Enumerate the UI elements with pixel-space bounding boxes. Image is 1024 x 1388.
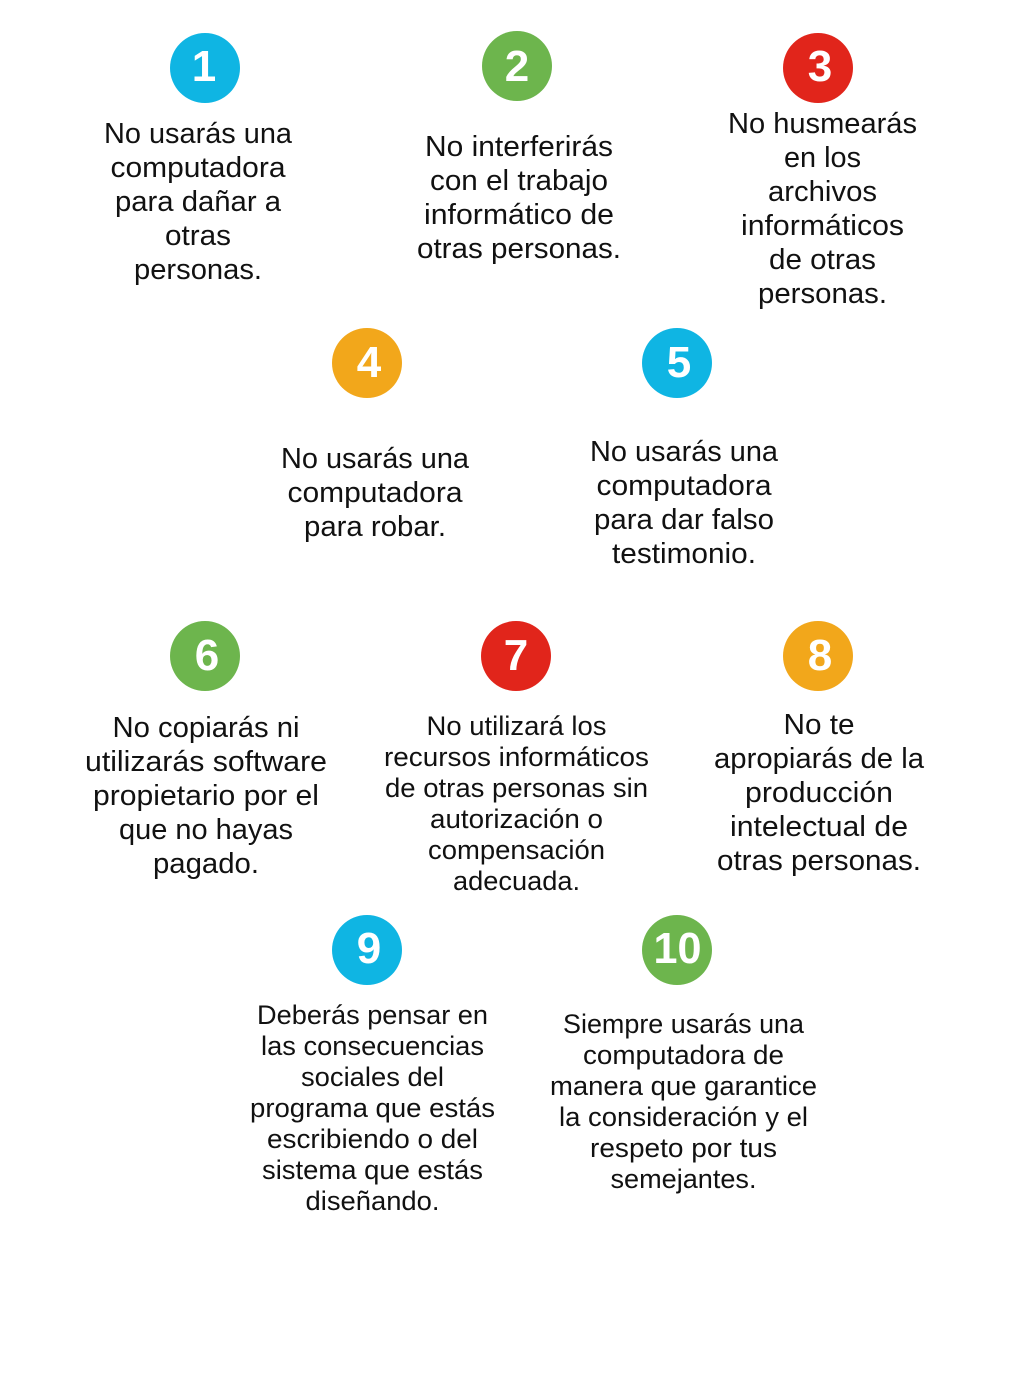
text: rule 2: informático de [424, 199, 614, 231]
text: rule 7: autorización o [430, 804, 603, 834]
text: rule 4: computadora [288, 477, 463, 509]
text: rule 9: programa que estás [250, 1093, 495, 1123]
panel: rule 2 [417, 31, 621, 265]
text: rule 1 [104, 118, 293, 286]
panel: rule 7 [384, 621, 649, 896]
text: rule 8: No te [784, 709, 854, 741]
icon: number 5 badge [642, 328, 712, 398]
text: rule 8: producción [745, 777, 893, 809]
text: rule 10: respeto por tus [590, 1133, 777, 1163]
icon: number 1 badge [170, 33, 240, 103]
text: rule 2 [417, 131, 621, 265]
icon: number 10 badge [642, 915, 712, 985]
text: rule 5: testimonio. [612, 538, 756, 570]
icon: number 10 badge: 10 [654, 924, 702, 973]
icon: number 8 badge [783, 621, 853, 691]
text: rule 2: No interferirás [425, 131, 613, 163]
text: rule 9: las consecuencias [261, 1031, 484, 1061]
text: rule 10 [550, 1009, 817, 1194]
text: rule 10: la consideración y el [559, 1102, 808, 1132]
text: rule 1: No usarás una [104, 118, 293, 150]
icon: number 4 badge [332, 328, 402, 398]
text: rule 7: de otras personas sin [385, 773, 648, 803]
text: rule 1: personas. [134, 254, 262, 286]
icon: number 9 badge [332, 915, 402, 985]
text: rule 7 [384, 711, 649, 896]
text: rule 10: computadora de [583, 1040, 784, 1070]
text: rule 4: No usarás una [281, 443, 470, 475]
text: rule 8: otras personas. [717, 845, 921, 877]
text: rule 9: escribiendo o del [267, 1124, 478, 1154]
panel: rule 3 [728, 33, 917, 310]
text: rule 1: para dañar a [115, 186, 282, 218]
text: rule 3: personas. [758, 278, 887, 310]
text: rule 5: No usarás una [590, 436, 779, 468]
panel: rule 9 [250, 915, 495, 1216]
text: rule 9: diseñando. [306, 1186, 440, 1216]
text: rule 6 [85, 712, 327, 880]
icon: number 5 badge: 5 [667, 338, 691, 387]
text: rule 9 [250, 1000, 495, 1216]
text: rule 9: sistema que estás [262, 1155, 483, 1185]
text: rule 4: para robar. [304, 511, 446, 543]
icon: number 8 badge: 8 [808, 631, 832, 680]
text: rule 3: de otras [769, 244, 876, 276]
text: rule 1: otras [165, 220, 231, 252]
text: rule 7: No utilizará los [426, 711, 606, 741]
icon: number 3 badge [783, 33, 853, 103]
icon: number 9 badge: 9 [357, 924, 381, 973]
icon: number 1 badge: 1 [192, 42, 216, 91]
text: rule 10: Siempre usarás una [563, 1009, 804, 1039]
panel: rule 10 [550, 915, 817, 1194]
text: rule 8 [714, 709, 925, 877]
text: rule 3 [728, 108, 917, 310]
text: rule 6: que no hayas [119, 814, 293, 846]
text: rule 6: No copiarás ni [112, 712, 300, 744]
text: rule 5 [590, 436, 779, 570]
text: rule 2: con el trabajo [430, 165, 608, 197]
icon: number 3 badge: 3 [808, 42, 832, 91]
icon: number 2 badge: 2 [505, 42, 529, 91]
text: rule 6: pagado. [153, 848, 259, 880]
panel: rule 5 [590, 328, 779, 570]
text: rule 7: recursos informáticos [384, 742, 649, 772]
text: rule 10: semejantes. [610, 1164, 756, 1194]
text: rule 4 [281, 443, 470, 543]
text: rule 3: en los [784, 142, 861, 174]
text: rule 2: otras personas. [417, 233, 621, 265]
panel: rule 1 [104, 33, 293, 286]
text: rule 8: apropiarás de la [714, 743, 925, 775]
icon: number 7 badge: 7 [504, 631, 528, 680]
text: rule 3: archivos [768, 176, 877, 208]
text: rule 7: compensación [428, 835, 605, 865]
text: rule 5: computadora [596, 470, 772, 502]
text: rule 1: computadora [110, 152, 286, 184]
panel: rule 8 [714, 621, 925, 877]
icon: number 4 badge: 4 [357, 338, 382, 387]
text: rule 10: manera que garantice [550, 1071, 817, 1101]
text: rule 9: Deberás pensar en [257, 1000, 488, 1030]
text: rule 3: informáticos [741, 210, 904, 242]
text: rule 6: utilizarás software [85, 746, 327, 778]
text: rule 6: propietario por el [93, 780, 319, 812]
icon: number 7 badge [481, 621, 551, 691]
text: rule 9: sociales del [301, 1062, 444, 1092]
text: rule 3: No husmearás [728, 108, 917, 140]
panel: rule 4 [281, 328, 470, 543]
text: rule 8: intelectual de [730, 811, 908, 843]
icon: number 6 badge [170, 621, 240, 691]
icon: number 2 badge [482, 31, 552, 101]
text: rule 5: para dar falso [594, 504, 774, 536]
panel: rule 6 [85, 621, 327, 880]
text: rule 7: adecuada. [453, 866, 580, 896]
icon: number 6 badge: 6 [195, 631, 219, 680]
